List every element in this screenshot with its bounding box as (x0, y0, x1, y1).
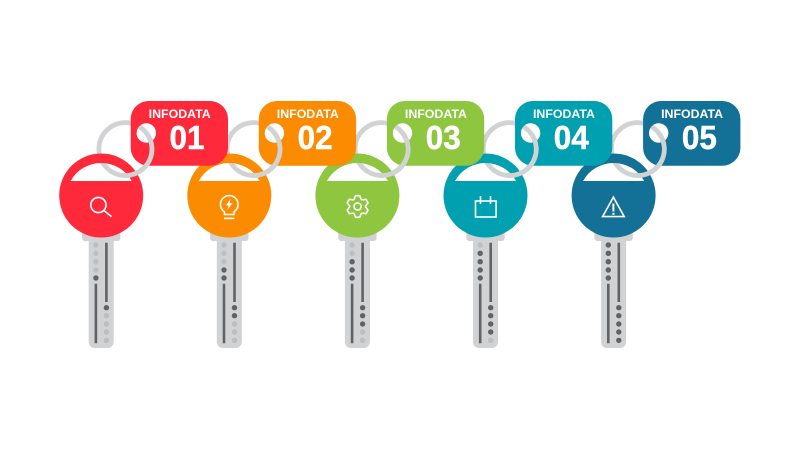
tag number 05: 05 (682, 120, 717, 157)
key 02 (187, 101, 356, 348)
ring front 04 (505, 133, 536, 176)
tag label 01: INFODATA (149, 107, 211, 121)
tag label 05: INFODATA (661, 107, 723, 121)
key ring 01 (99, 123, 152, 175)
tag 04 (515, 101, 612, 166)
icon: magnifying glass (91, 197, 112, 217)
tag 02 (259, 101, 356, 166)
tag number 02: 02 (298, 120, 333, 157)
tag number 03: 03 (426, 120, 461, 157)
key 01 (59, 101, 228, 348)
key 04 (444, 101, 612, 348)
tag number 01: 01 (170, 120, 204, 157)
key ring 04 (483, 123, 536, 175)
tag 03 (387, 101, 484, 166)
key head 02 (187, 154, 271, 238)
key ring 02 (227, 123, 280, 175)
key ring 05 (611, 123, 664, 175)
key 05 (572, 101, 740, 348)
ring front 01 (121, 133, 152, 176)
key head 04 (444, 154, 528, 238)
key head 01 (59, 154, 143, 238)
ring front 05 (633, 133, 664, 176)
key 03 (315, 101, 484, 348)
icon: light bulb (220, 196, 238, 218)
key blade 04 (466, 228, 505, 348)
key blade 03 (338, 228, 377, 348)
tag label 04: INFODATA (533, 107, 595, 121)
icon: calendar (476, 196, 496, 217)
key head 05 (572, 154, 656, 238)
key blade 05 (594, 228, 633, 348)
tag number 04: 04 (554, 120, 589, 157)
ring front 02 (249, 133, 280, 176)
icon: gear (347, 196, 368, 217)
tag 01 (131, 101, 228, 166)
key ring 03 (355, 123, 408, 175)
tag 05 (643, 101, 740, 166)
key head 03 (315, 154, 399, 238)
ring front 03 (377, 133, 408, 176)
tag label 02: INFODATA (277, 107, 339, 121)
tag label 03: INFODATA (405, 107, 467, 121)
icon: warning triangle (603, 197, 624, 217)
key blade 02 (210, 228, 248, 348)
key blade 01 (82, 228, 120, 348)
